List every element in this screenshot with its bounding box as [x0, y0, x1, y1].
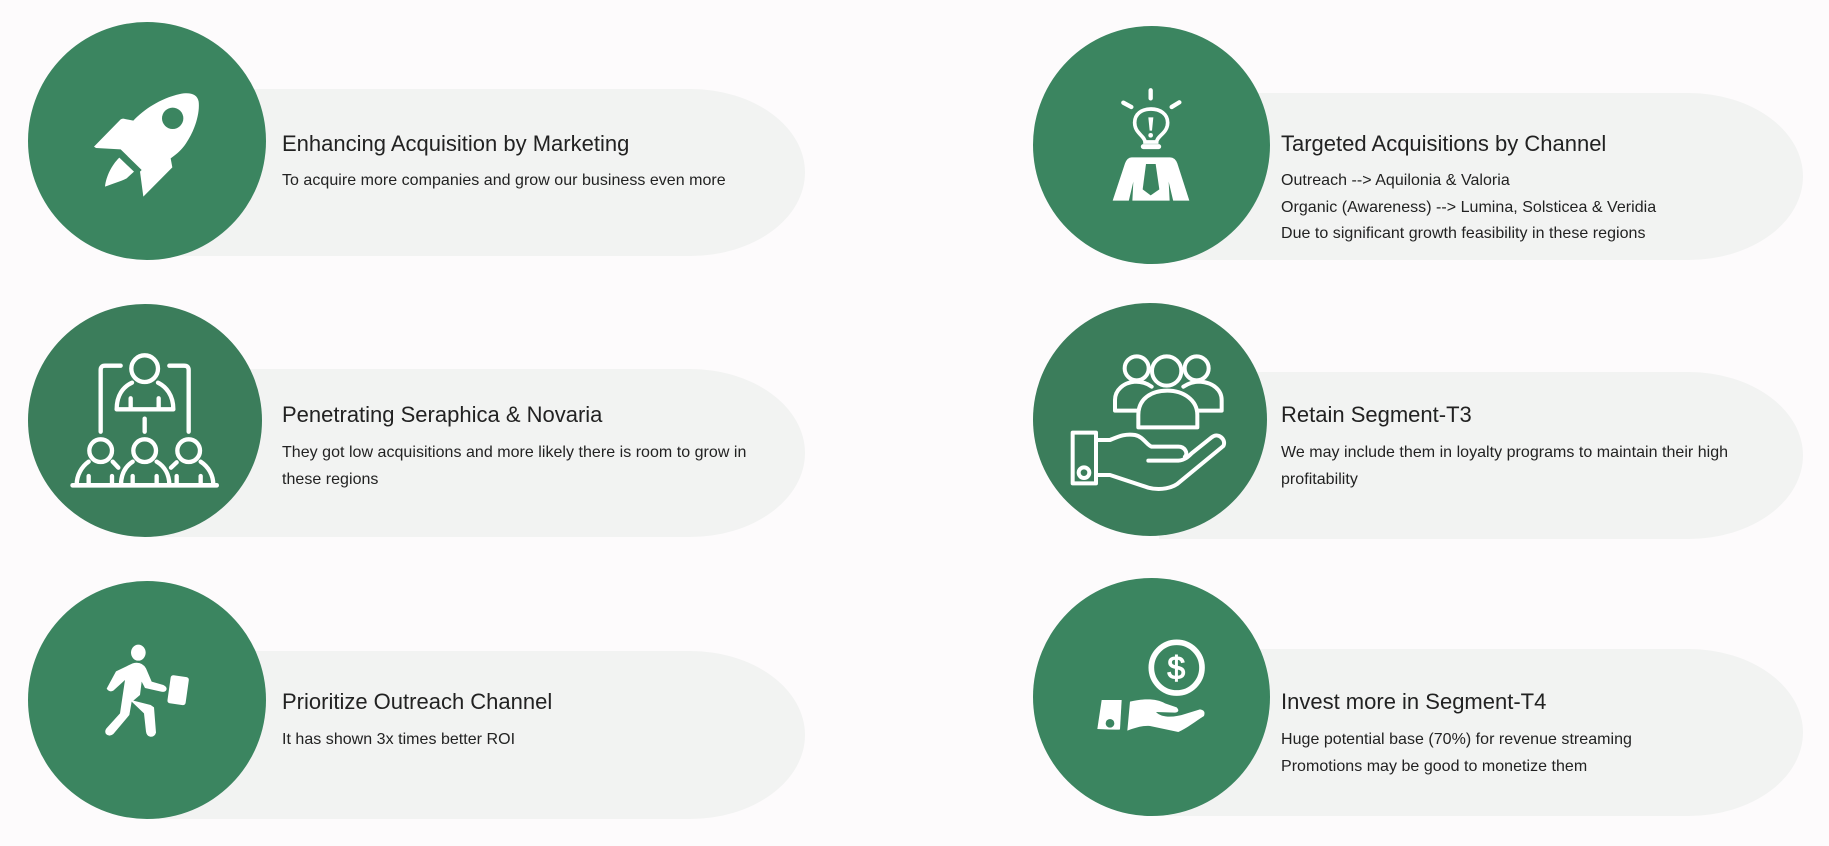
icon: walking businessman	[105, 644, 189, 737]
text block	[1281, 731, 1632, 774]
pill background	[155, 369, 805, 537]
text block: Organic (Awareness) --> Lumina, Solsticea & Veridia	[1281, 198, 1656, 216]
heading: Retain Segment-T3	[1281, 402, 1472, 427]
circle badge	[28, 304, 262, 537]
text block: It has shown 3x times better ROI	[282, 731, 515, 748]
text block: profitability	[1281, 470, 1358, 488]
text block	[1281, 444, 1728, 488]
heading: Invest more in Segment-T4	[1281, 689, 1546, 714]
icon: lightbulb head businessman	[1112, 88, 1190, 201]
icon: team hierarchy	[70, 353, 219, 488]
text block: these regions	[282, 470, 378, 488]
heading: Enhancing Acquisition by Marketing	[282, 131, 629, 156]
icon: hand with dollar coin: $	[1167, 650, 1185, 686]
panel: Retain Segment-T3	[1033, 303, 1803, 539]
text block: We may include them in loyalty programs to maintain their high	[1281, 444, 1728, 461]
circle badge	[28, 22, 266, 260]
heading: Penetrating Seraphica & Novaria	[282, 402, 602, 427]
pill background	[158, 651, 805, 819]
text block	[282, 444, 746, 488]
pill background	[1159, 372, 1803, 539]
text block: Outreach --> Aquilonia & Valoria	[1281, 172, 1510, 189]
panel: Enhancing Acquisition by Marketing	[28, 22, 805, 260]
pill background	[1159, 93, 1803, 260]
text block: Due to significant growth feasibility in these regions	[1281, 225, 1645, 242]
circle badge	[1032, 303, 1266, 536]
heading: Prioritize Outreach Channel	[282, 689, 552, 714]
text block: They got low acquisitions and more likely there is room to grow in	[282, 444, 746, 461]
panel: Prioritize Outreach Channel	[28, 581, 805, 819]
panel: Invest more in Segment-T4	[1033, 578, 1803, 816]
text block: Promotions may be good to monetize them	[1281, 758, 1587, 774]
panel: Targeted Acquisitions by Channel	[1033, 26, 1803, 264]
circle badge	[1032, 578, 1270, 816]
text block	[1281, 172, 1656, 242]
icon: rocket	[94, 93, 199, 196]
icon: hand holding team	[1070, 354, 1226, 491]
heading: Targeted Acquisitions by Channel	[1281, 131, 1606, 156]
icon: hand with dollar coin	[1097, 640, 1205, 732]
text block: To acquire more companies and grow our business even more	[282, 172, 726, 189]
panel: Penetrating Seraphica & Novaria	[28, 304, 805, 537]
circle badge	[28, 581, 266, 819]
pill background	[158, 89, 805, 256]
circle badge	[1032, 26, 1270, 264]
pill background	[1159, 649, 1803, 816]
text block: Huge potential base (70%) for revenue streaming	[1281, 731, 1632, 748]
